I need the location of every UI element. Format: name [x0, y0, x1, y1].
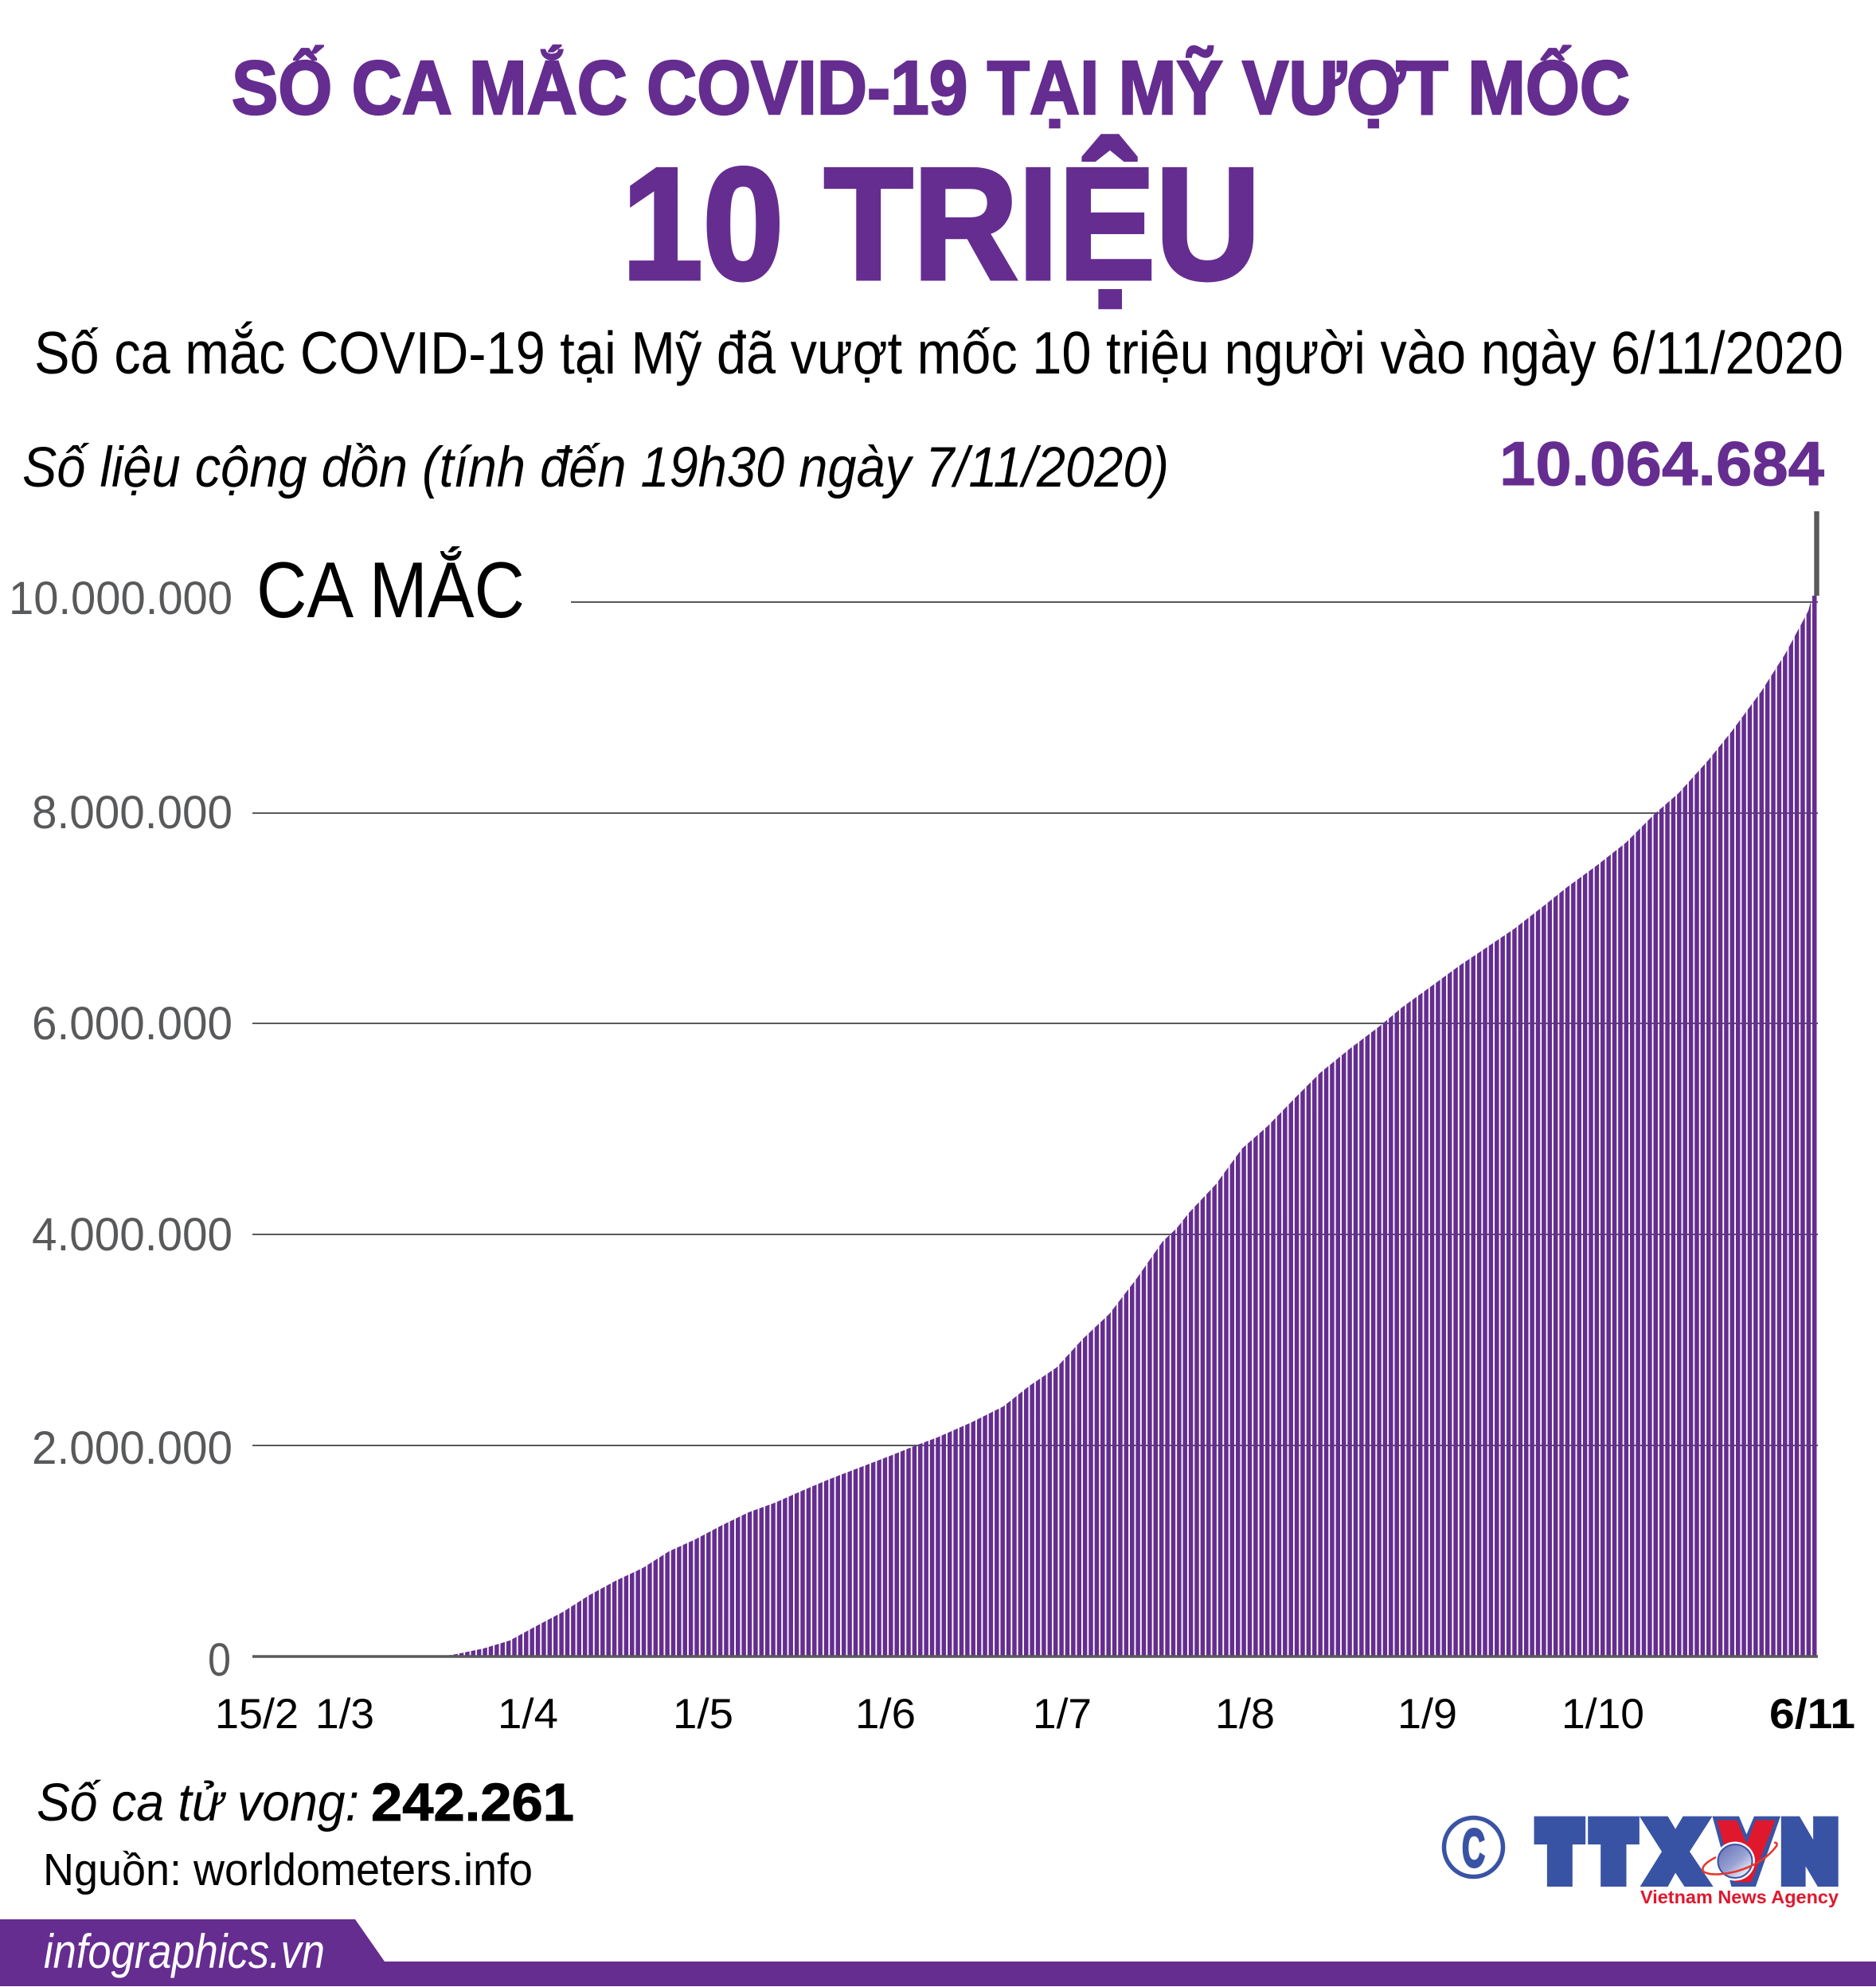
daily bars: [449, 596, 1817, 1655]
x axis labels: 1/8: [1215, 1691, 1275, 1738]
x axis labels: 1/3: [315, 1691, 374, 1738]
icon: copyright: C: [1462, 1818, 1485, 1879]
chart caption: Số liệu cộng dồn (tính đến 19h30 ngày 7/11/2020): [22, 436, 1169, 499]
x axis labels: 1/5: [673, 1691, 733, 1738]
x axis labels: 1/9: [1397, 1691, 1457, 1738]
y axis labels: 6.000.000: [32, 998, 233, 1050]
x axis labels: 6/11: [1769, 1691, 1855, 1738]
deaths figure: [37, 1773, 574, 1832]
orbit: [1702, 1843, 1777, 1875]
title: headline line 1: SỐ CA MẮC COVID-19 TẠI MỸ VƯỢT MỐC: [232, 45, 1630, 131]
globe: [1715, 1841, 1755, 1881]
baseline: [252, 1655, 1818, 1658]
y axis labels: 8.000.000: [32, 787, 233, 839]
footer banner: [0, 1919, 1876, 1986]
y axis labels: 4.000.000: [32, 1209, 233, 1261]
x axis labels: 15/2: [215, 1691, 299, 1738]
deaths figure: 242.261: [371, 1773, 574, 1832]
bar chart: cumulative cases: [252, 511, 1819, 1656]
logo: TTXVN: [1534, 1817, 1839, 1907]
y axis labels: 10.000.000: [9, 573, 233, 624]
unit label: CA MẮC: [256, 546, 525, 634]
grid lines: [252, 602, 1818, 1445]
deaths figure: Số ca tử vong:: [37, 1773, 359, 1832]
x axis labels: 1/4: [498, 1691, 558, 1738]
marker line to total: [1814, 511, 1819, 596]
x axis labels: [215, 1691, 1855, 1738]
y axis labels: 2.000.000: [32, 1422, 233, 1474]
source: Nguồn: worldometers.info: [43, 1844, 533, 1895]
agency name: Vietnam News Agency: [1640, 1887, 1839, 1907]
title: 10 triệu: 10 TRIỆU: [622, 135, 1260, 313]
y axis labels: [9, 573, 233, 1686]
icon: copyright: [1444, 1817, 1503, 1879]
x axis labels: 1/6: [855, 1691, 916, 1738]
y axis labels: 0: [208, 1634, 231, 1686]
x axis labels: 1/7: [1033, 1691, 1092, 1738]
site name: infographics.vn: [44, 1925, 325, 1978]
total value callout: 10.064.684: [1499, 428, 1824, 499]
x axis labels: 1/10: [1561, 1691, 1644, 1738]
